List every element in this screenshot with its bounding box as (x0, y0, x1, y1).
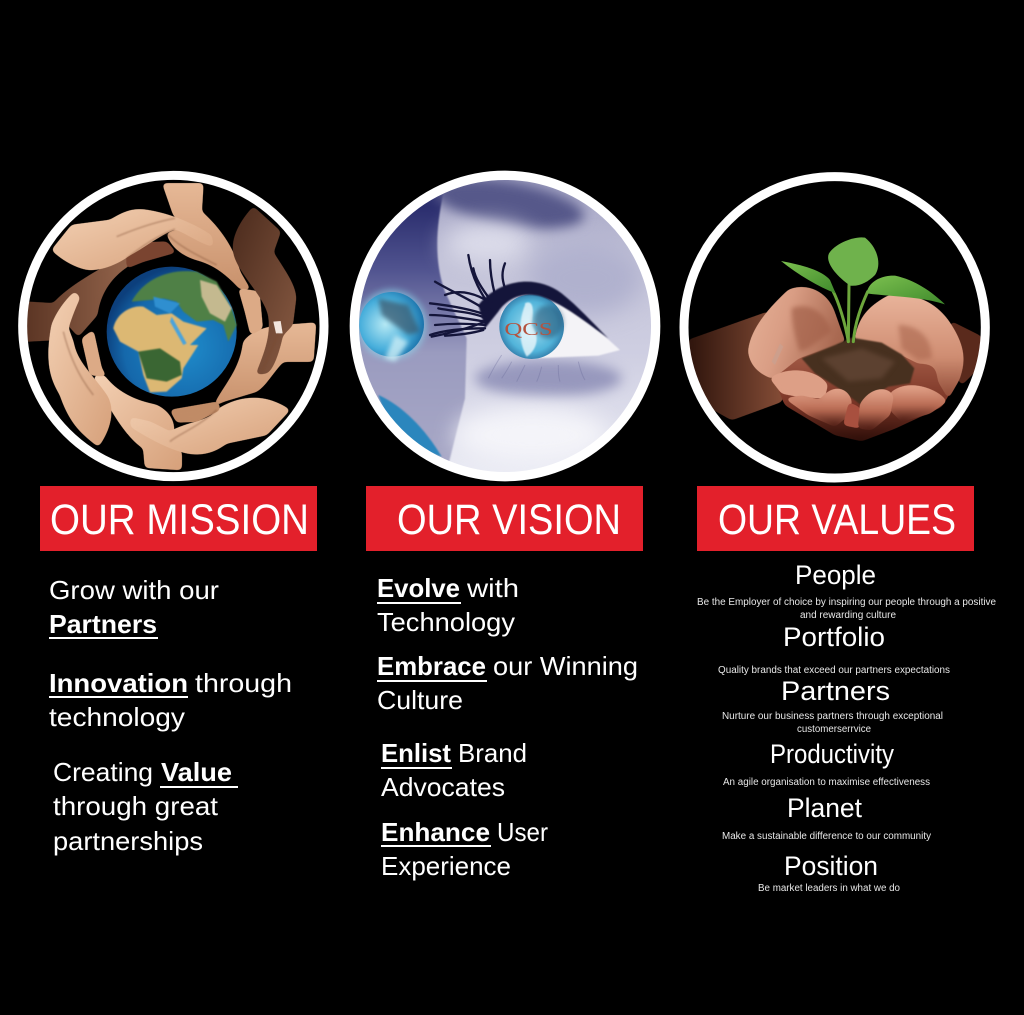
icon: eye with globes (345, 165, 665, 485)
hand: lower right (213, 323, 316, 407)
lower lashes (488, 355, 585, 382)
brow (432, 180, 590, 236)
leaves (828, 237, 878, 286)
text block: mission list: Creating (53, 757, 153, 787)
hand: bottom right (131, 398, 290, 454)
right hand (855, 295, 963, 398)
upper eye socket (528, 242, 642, 315)
left shadow (359, 194, 468, 461)
text block: values list: Position (784, 851, 878, 881)
text block: vision list: Technology (377, 607, 515, 637)
text block: vision list: our Winning (493, 651, 638, 681)
text block: mission list: technology (49, 702, 185, 732)
text block: vision list: Brand (458, 738, 527, 768)
icon: hands around globe in a ring (23, 175, 324, 477)
heading: our mission (40, 486, 317, 551)
stems (833, 285, 868, 342)
pale forehead (445, 223, 532, 263)
text block: vision list: Culture (377, 685, 463, 715)
text block: values list: Nurture our business partners through exceptional (722, 711, 943, 722)
heading: our values: OUR VALUES (718, 496, 956, 544)
iris reflection (533, 305, 563, 338)
left globe (357, 290, 426, 362)
left hand (748, 287, 845, 378)
heading: our vision (366, 486, 643, 551)
text block: values list: An agile organisation to maximise effectiveness (723, 777, 930, 788)
hand: top wrist (162, 183, 251, 290)
base under hands (770, 345, 958, 441)
shadow inside right hand (898, 325, 932, 360)
right arm (951, 322, 980, 384)
text block: mission list: partnerships (53, 826, 203, 856)
text block: vision list: Evolve (377, 573, 460, 603)
text block: values list: Planet (787, 793, 862, 823)
ring (23, 175, 324, 477)
text block: values list: People (795, 560, 876, 590)
heading: our mission: OUR MISSION (50, 496, 309, 544)
text block: values list: Productivity (770, 739, 894, 769)
eye white (501, 300, 620, 358)
cheek (455, 407, 608, 463)
iris highlight (520, 302, 537, 357)
text block: mission list: Grow with our (49, 575, 219, 605)
heading: our vision: OUR VISION (397, 496, 621, 544)
icon: globe (107, 267, 237, 397)
text block: vision list: User (497, 817, 548, 847)
heading: our values (697, 486, 974, 551)
fingers left (770, 371, 828, 398)
face (436, 180, 651, 472)
fingers right (890, 385, 947, 422)
nail (273, 321, 283, 333)
text block: mission list: through (195, 668, 292, 698)
text block: values list: Partners (781, 676, 890, 706)
hand: dark right (233, 207, 296, 374)
text block: mission list: through great (53, 791, 219, 821)
text block: vision list: with (466, 573, 519, 603)
text block: vision list (377, 573, 638, 881)
upper lid (478, 282, 608, 338)
text block: mission list (49, 575, 292, 856)
nail (772, 343, 783, 365)
under eye (475, 360, 622, 397)
hand: left dark (23, 255, 130, 342)
icon: hands holding seedling (684, 177, 985, 478)
text block: values list: Be market leaders in what we do (758, 883, 900, 894)
iris (499, 294, 564, 359)
text block: vision list: Enhance (381, 817, 490, 847)
text block: values list: and rewarding culture (800, 610, 896, 621)
ring (354, 175, 656, 477)
eye logo: QCS (504, 319, 553, 339)
text block: mission list: Innovation (49, 668, 188, 698)
finger: left inner (82, 332, 105, 376)
lashes (430, 255, 505, 337)
text block: vision list: Embrace (377, 651, 486, 681)
soil highlight (822, 348, 895, 382)
text block: values list: Quality brands that exceed our partners expectations (718, 665, 950, 676)
text block: vision list: Enlist (381, 738, 451, 768)
text block: vision list: Advocates (381, 772, 505, 802)
text block: mission list: Value (161, 757, 232, 787)
hand: top left (52, 209, 213, 270)
text block: values list: Be the Employer of choice by inspiring our people through a positive (697, 597, 996, 608)
text block: values list: Make a sustainable difference to our community (722, 831, 931, 842)
text block: values list (697, 560, 996, 894)
fingers: bottom right (170, 402, 220, 422)
finger: right inner (238, 288, 263, 335)
soil (802, 338, 914, 404)
hand: bottom wrist (93, 375, 182, 470)
shadow inside left hand (792, 306, 832, 352)
text block: vision list: Experience (381, 851, 511, 881)
left arm (688, 312, 788, 420)
ring (684, 177, 985, 478)
hand: left (49, 292, 111, 447)
lower globe (378, 395, 442, 457)
text block: values list: Portfolio (783, 622, 885, 652)
text block: values list: customerserrvice (797, 724, 871, 735)
creases (63, 218, 278, 442)
hand: dark under fingers (127, 242, 176, 268)
text block: mission list: Partners (49, 609, 157, 639)
